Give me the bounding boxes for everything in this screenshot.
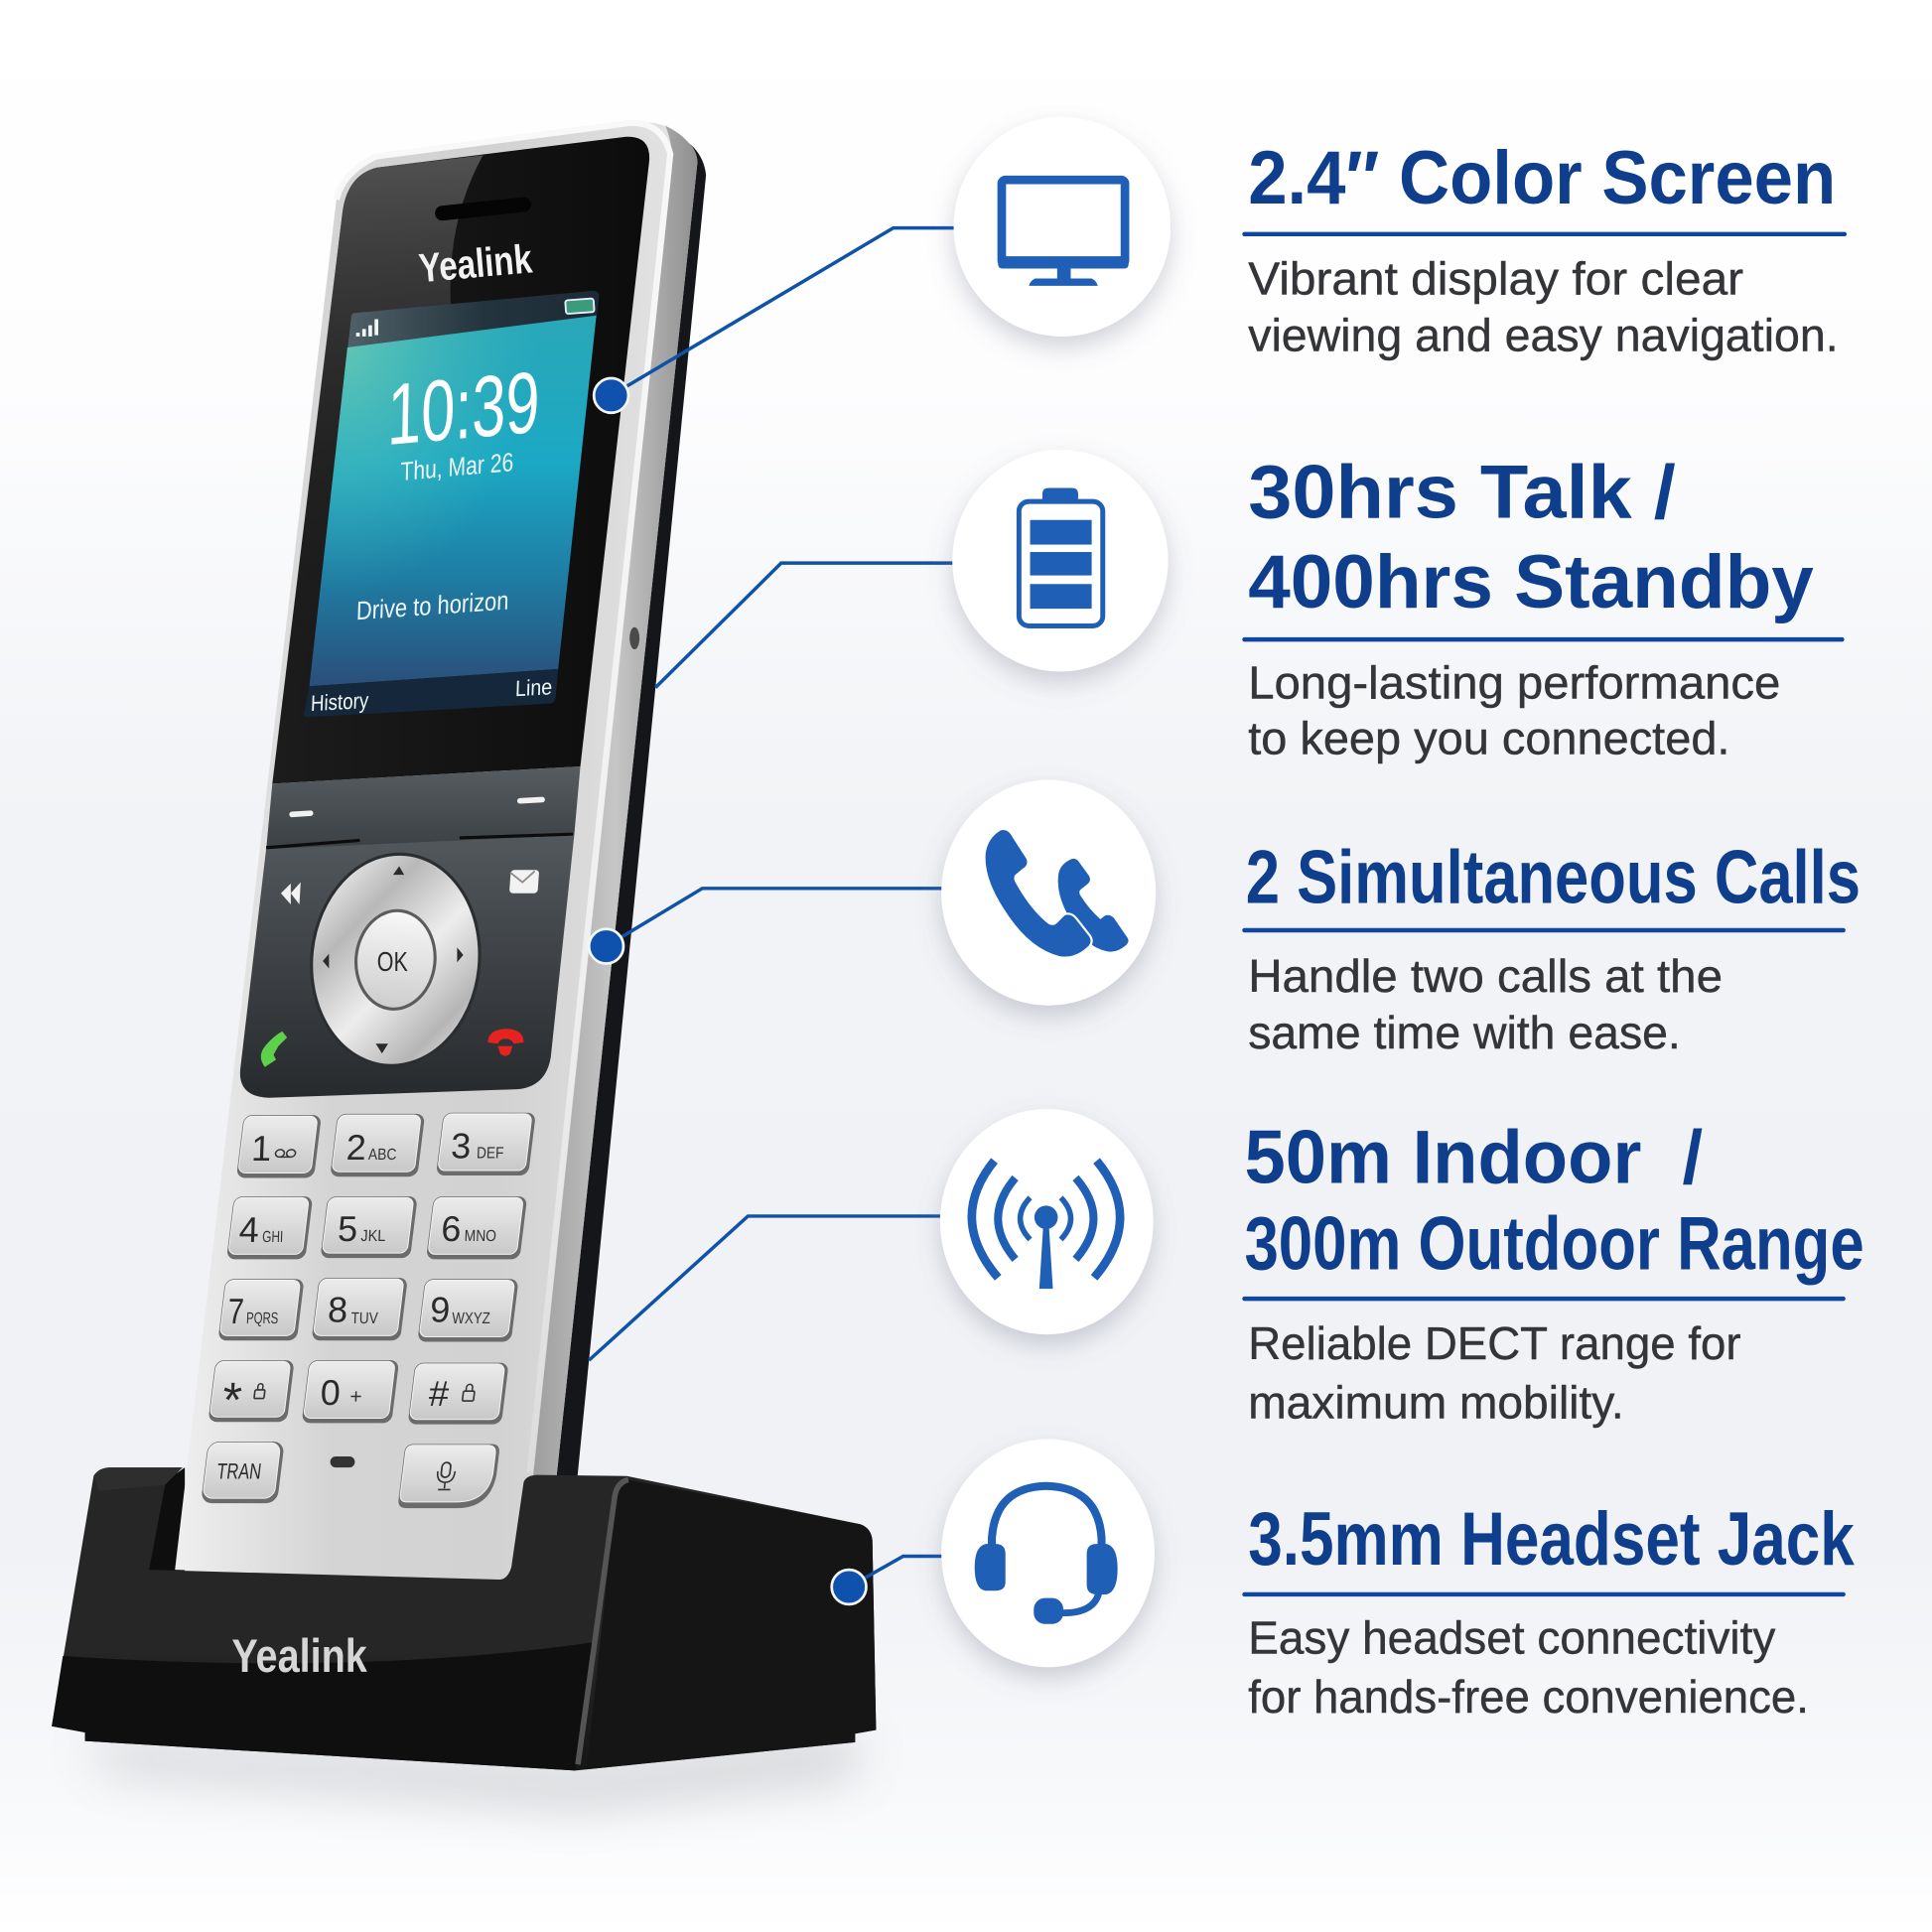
key 1: 1	[251, 1128, 272, 1169]
key 8: 8	[328, 1290, 348, 1330]
dock corner highlight	[578, 1480, 628, 1764]
dock lip	[93, 1467, 183, 1491]
message key icon	[509, 870, 539, 894]
icon circle: headset	[941, 1440, 1155, 1667]
left softkey: History	[311, 688, 369, 716]
key 7	[217, 1279, 305, 1340]
heading: 2.4″ Color Screen	[1248, 136, 1836, 220]
connector 1	[594, 228, 955, 413]
date: Thu, Mar 26	[400, 447, 514, 486]
icon: battery	[1019, 487, 1103, 625]
panel: headset jack	[941, 1440, 1856, 1723]
right softkey: Line	[515, 674, 553, 701]
key 2: ABC	[368, 1146, 397, 1164]
key 2	[330, 1114, 425, 1176]
key 5	[321, 1196, 418, 1258]
key 9	[417, 1279, 518, 1342]
softkey bar	[304, 669, 558, 717]
icon circle: battery	[952, 450, 1169, 671]
wallpaper highlight	[310, 316, 597, 686]
OK label: OK	[377, 946, 408, 977]
microphone hole	[331, 1456, 354, 1467]
description: Easy headset connectivity	[1248, 1612, 1775, 1664]
heading: 50m Indoor /	[1244, 1115, 1703, 1199]
heading: 400hrs Standby	[1248, 540, 1814, 624]
navigation ring	[301, 846, 489, 1074]
softkey indicators	[292, 799, 542, 814]
icon circle: calls	[941, 780, 1156, 1006]
icon: antenna	[972, 1161, 1120, 1289]
back key icon	[281, 883, 301, 904]
description	[1248, 657, 1780, 764]
keypad	[201, 1113, 536, 1508]
description: same time with ease.	[1248, 1007, 1681, 1058]
side button	[629, 627, 639, 649]
panel slots	[266, 834, 573, 848]
status bar	[347, 291, 599, 349]
dock body	[52, 1467, 876, 1770]
connector 2	[655, 563, 952, 688]
hang up key icon	[487, 1029, 523, 1056]
call key icon	[261, 1032, 287, 1067]
navigation panel	[240, 835, 574, 1098]
description	[1248, 1317, 1741, 1428]
icon circle: monitor	[954, 117, 1171, 337]
battery status	[565, 299, 595, 314]
wallpaper	[310, 316, 597, 686]
key 5: JKL	[360, 1227, 386, 1245]
key 5: 5	[337, 1208, 358, 1249]
description: Handle two calls at the	[1248, 950, 1723, 1002]
brand logo on dock: Yealink	[231, 1629, 367, 1682]
description: maximum mobility.	[1248, 1376, 1624, 1428]
key 4: GHI	[262, 1228, 284, 1246]
key hash	[408, 1363, 509, 1425]
clock: 10:39	[386, 353, 540, 464]
description: to keep you connected.	[1248, 713, 1729, 764]
description: viewing and easy navigation.	[1248, 310, 1839, 361]
key 9: WXYZ	[452, 1310, 490, 1327]
phone black face	[272, 137, 649, 783]
heading	[1248, 450, 1814, 624]
phone back edge	[548, 131, 706, 1484]
icon: headset	[975, 1486, 1118, 1624]
key 7: PQRS	[246, 1310, 279, 1327]
key 8	[312, 1278, 408, 1340]
screen	[304, 291, 599, 717]
signal bars	[356, 319, 378, 337]
dock side face	[587, 1478, 876, 1769]
key 4: 4	[238, 1209, 260, 1250]
dock floor shadow	[86, 1739, 863, 1804]
description: Long-lasting performance	[1248, 657, 1780, 709]
connector 4	[589, 1216, 940, 1360]
key 6: 6	[441, 1208, 462, 1249]
key 1	[236, 1115, 322, 1177]
softkey panel	[266, 766, 581, 850]
phone side band	[532, 126, 697, 1484]
key 3: 3	[451, 1126, 472, 1167]
description: Vibrant display for clear	[1248, 253, 1743, 305]
key 6: MNO	[464, 1227, 496, 1245]
speaker slot	[443, 205, 523, 213]
OK button	[351, 906, 440, 1013]
key TRAN	[201, 1442, 285, 1503]
key 0: 0	[320, 1372, 342, 1413]
key 2: 2	[345, 1127, 367, 1168]
navigation arrows	[323, 866, 464, 1053]
description	[1248, 1612, 1809, 1723]
panel: color screen	[954, 117, 1845, 361]
icon: phones	[986, 830, 1129, 957]
charging dock	[52, 1467, 876, 1770]
key star	[207, 1360, 295, 1428]
phone bright rim	[337, 123, 670, 1472]
key 9: 9	[430, 1290, 451, 1330]
connector 5	[832, 1556, 942, 1604]
key 3: DEF	[477, 1145, 504, 1163]
key 7: 7	[227, 1291, 245, 1331]
description: Reliable DECT range for	[1248, 1317, 1741, 1369]
connector 3	[589, 889, 942, 964]
icon circle: signal	[940, 1109, 1154, 1334]
heading	[1244, 1115, 1864, 1286]
phone silver body	[175, 122, 697, 1583]
description	[1248, 253, 1839, 361]
key 4	[226, 1196, 313, 1259]
phone handset on dock	[148, 122, 706, 1583]
dock notch back wall	[148, 1467, 185, 1573]
key 6	[426, 1196, 527, 1259]
key hash: #	[428, 1373, 450, 1414]
description	[1248, 950, 1723, 1058]
key 0	[302, 1360, 399, 1423]
key TRAN: TRAN	[215, 1458, 263, 1483]
panel: range	[940, 1109, 1864, 1428]
heading: 30hrs Talk /	[1248, 450, 1676, 534]
dock lower gloss	[52, 1642, 593, 1770]
face gloss	[277, 155, 483, 740]
icon: monitor	[998, 180, 1129, 286]
key star: *	[221, 1372, 243, 1428]
key 8: TUV	[350, 1310, 378, 1327]
panel: simultaneous calls	[941, 780, 1861, 1058]
description: for hands-free convenience.	[1248, 1671, 1809, 1723]
key 0: +	[349, 1386, 362, 1409]
panel: battery	[952, 450, 1842, 764]
key mute	[397, 1445, 500, 1508]
brand logo on handset: Yealink	[417, 235, 534, 291]
wallpaper caption: Drive to horizon	[355, 585, 509, 625]
key 3	[436, 1113, 536, 1175]
